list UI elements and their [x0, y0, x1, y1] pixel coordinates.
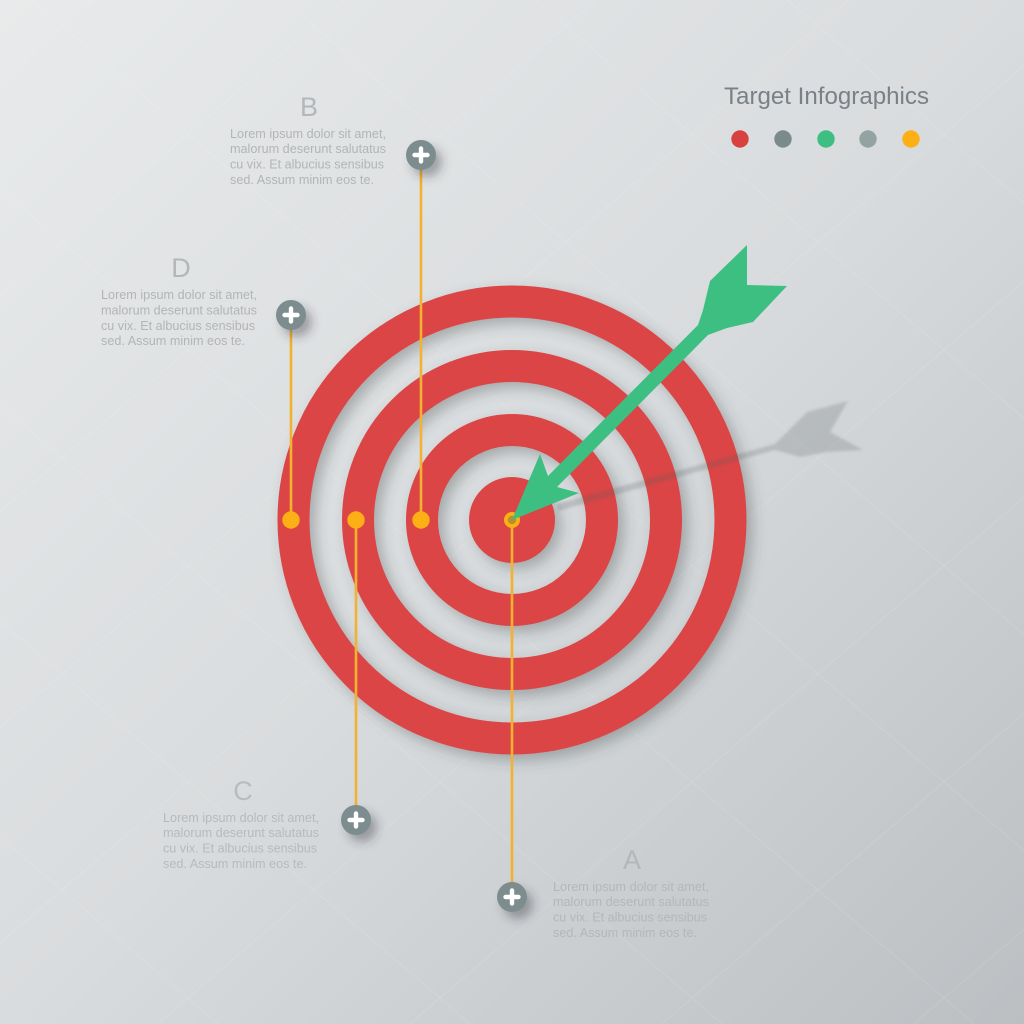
- text block D: cu vix. Et albucius sensibus: [101, 318, 255, 333]
- arrow: [512, 245, 787, 520]
- title: Target Infographics: [724, 83, 929, 110]
- text block D: Lorem ipsum dolor sit amet,: [101, 287, 257, 302]
- pin D: [276, 300, 306, 330]
- text block D: malorum deserunt salutatus: [101, 302, 257, 318]
- text block B: [230, 92, 386, 187]
- pin A: [497, 882, 527, 912]
- text block D: sed. Assum minim eos te.: [101, 333, 245, 348]
- text block D: D: [171, 253, 191, 283]
- text block C: sed. Assum minim eos te.: [163, 856, 307, 871]
- text block A: A: [623, 845, 641, 875]
- text block A: malorum deserunt salutatus: [553, 894, 709, 909]
- text block B: Lorem ipsum dolor sit amet,: [230, 126, 386, 141]
- text block A: cu vix. Et albucius sensibus: [553, 910, 707, 924]
- text block A: Lorem ipsum dolor sit amet,: [553, 879, 709, 894]
- text block C: Lorem ipsum dolor sit amet,: [163, 810, 319, 825]
- text block A: [553, 845, 709, 940]
- text block B: B: [300, 92, 318, 122]
- text block C: C: [233, 776, 253, 806]
- text block B: sed. Assum minim eos te.: [230, 172, 374, 187]
- text block B: malorum deserunt salutatus: [230, 141, 386, 156]
- connector lines and target dots: [282, 155, 520, 897]
- text block A: sed. Assum minim eos te.: [553, 925, 697, 940]
- legend: colour dots: [731, 130, 920, 148]
- pin B: [406, 140, 436, 170]
- pin C: [341, 805, 371, 835]
- text block C: [163, 776, 319, 871]
- target: concentric red rings: [294, 302, 730, 738]
- text block D: [101, 253, 257, 348]
- text block C: cu vix. Et albucius sensibus: [163, 840, 317, 856]
- text block C: malorum deserunt salutatus: [163, 825, 319, 840]
- text block B: cu vix. Et albucius sensibus: [230, 156, 384, 172]
- arrow shadow: [557, 401, 863, 511]
